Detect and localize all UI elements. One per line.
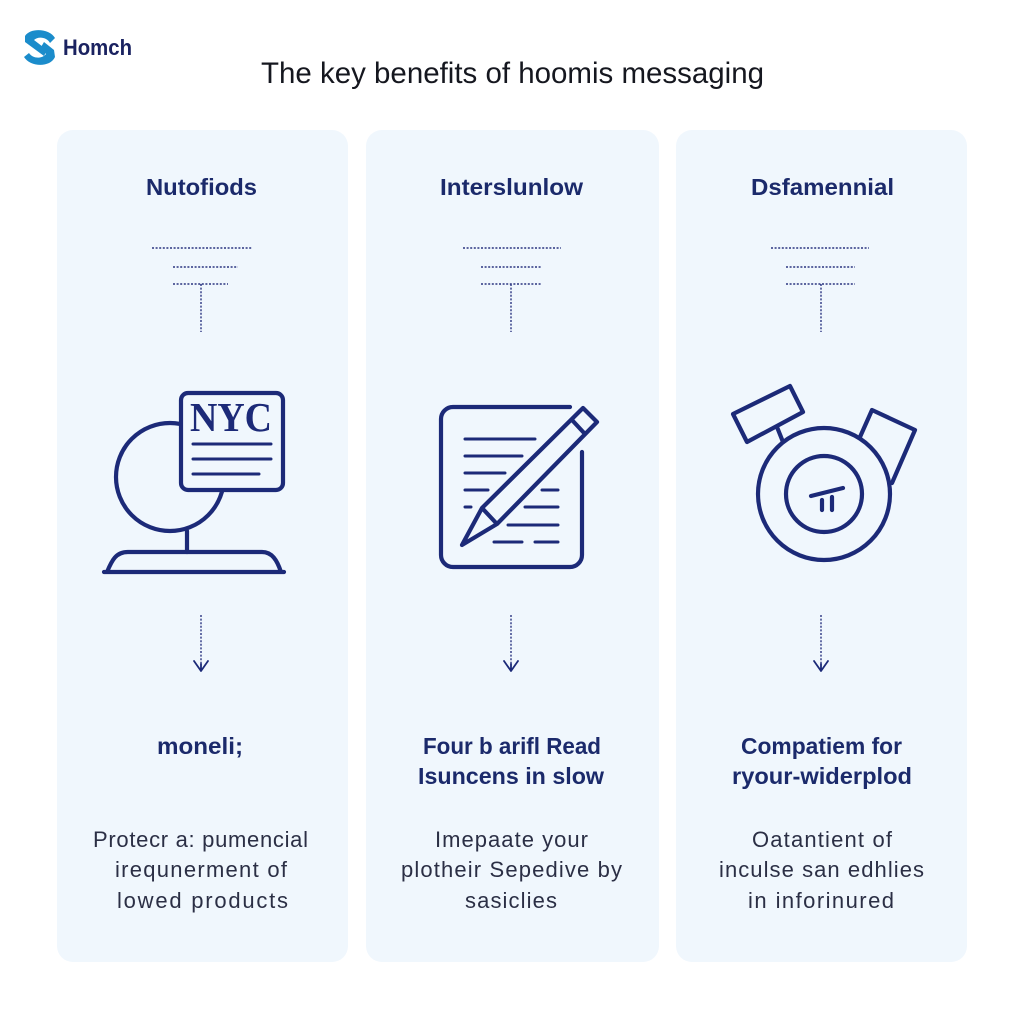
benefit description (93, 827, 308, 913)
benefit description: plotheir Sepedive by (401, 857, 622, 882)
benefit description: Oatantient of (752, 827, 893, 852)
icon: globe with NYC card: NYC (190, 394, 272, 440)
icon: globe with NYC card (104, 393, 284, 572)
dotted connector (463, 248, 561, 332)
panel: Interslunlow (366, 130, 659, 962)
benefit description: irequnerment of (115, 857, 288, 882)
icon: document and pencil (441, 407, 597, 567)
icon: dial with tabs (733, 386, 915, 560)
benefit heading: Four b arifl Read (423, 733, 601, 759)
panel heading: Interslunlow (440, 174, 583, 200)
benefit heading: ryour-widerplod (732, 763, 912, 789)
benefit description: Protecr a: pumencial (93, 827, 308, 852)
dotted arrow (194, 615, 208, 671)
title: The key benefits of hoomis messaging (261, 57, 764, 90)
panel background (676, 130, 967, 962)
benefit description: in inforinured (748, 888, 894, 913)
dotted connector (152, 248, 252, 332)
panel background (57, 130, 348, 962)
panel: Nutofiods (57, 130, 348, 962)
panel: Dsfamennial (676, 130, 967, 962)
panel heading: Dsfamennial (751, 174, 894, 200)
benefit description: sasiclies (465, 888, 557, 913)
benefit heading: Isuncens in slow (418, 763, 604, 789)
benefit heading: moneli; (157, 733, 243, 759)
dotted arrow (504, 615, 518, 671)
benefit description (401, 827, 622, 913)
benefit description: lowed products (117, 888, 288, 913)
benefit heading (418, 733, 604, 789)
icon: logo mark (24, 30, 55, 65)
benefit heading: Compatiem for (741, 733, 902, 759)
benefit description: Imepaate your (435, 827, 588, 852)
logo wordmark: Homch (63, 35, 132, 60)
panel heading: Nutofiods (146, 174, 257, 200)
dotted arrow (814, 615, 828, 671)
benefit description (719, 827, 924, 913)
benefit description: inculse san edhlies (719, 857, 924, 882)
benefit heading (732, 733, 912, 789)
dotted connector (771, 248, 869, 332)
logo: Homch (24, 30, 132, 65)
panel background (366, 130, 659, 962)
